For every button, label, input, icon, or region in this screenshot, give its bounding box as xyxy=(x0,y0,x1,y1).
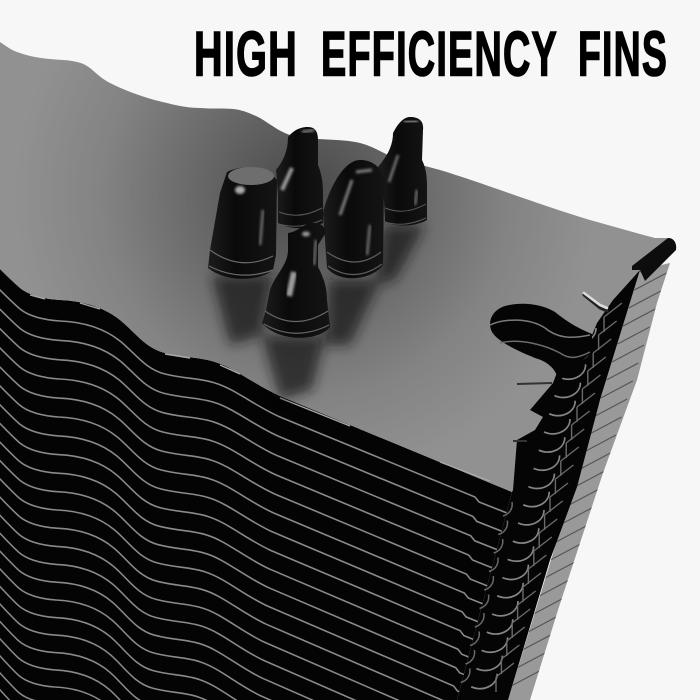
heat pipe: rear right xyxy=(378,117,427,226)
plate front edge highlight xyxy=(30,295,490,481)
heat pipe: front centre xyxy=(262,223,330,338)
bent silver fin tab xyxy=(584,293,607,311)
fin curls along the front corner xyxy=(461,502,512,682)
corner tab xyxy=(632,238,676,281)
side column: black fin folds with hooks xyxy=(457,270,640,700)
title: HIGH xyxy=(194,20,298,90)
front face: wavy fin stack xyxy=(0,269,512,700)
hole in plate with fin arcs xyxy=(490,304,592,382)
heat pipe: centre right xyxy=(323,160,384,278)
top plate xyxy=(0,30,668,492)
post reflections xyxy=(212,225,425,400)
small fin notches xyxy=(513,383,552,441)
heat pipe: left xyxy=(208,167,277,279)
side strip: grey fin edges xyxy=(508,255,672,700)
heat pipe: rear centre xyxy=(276,127,323,228)
title xyxy=(194,20,668,90)
